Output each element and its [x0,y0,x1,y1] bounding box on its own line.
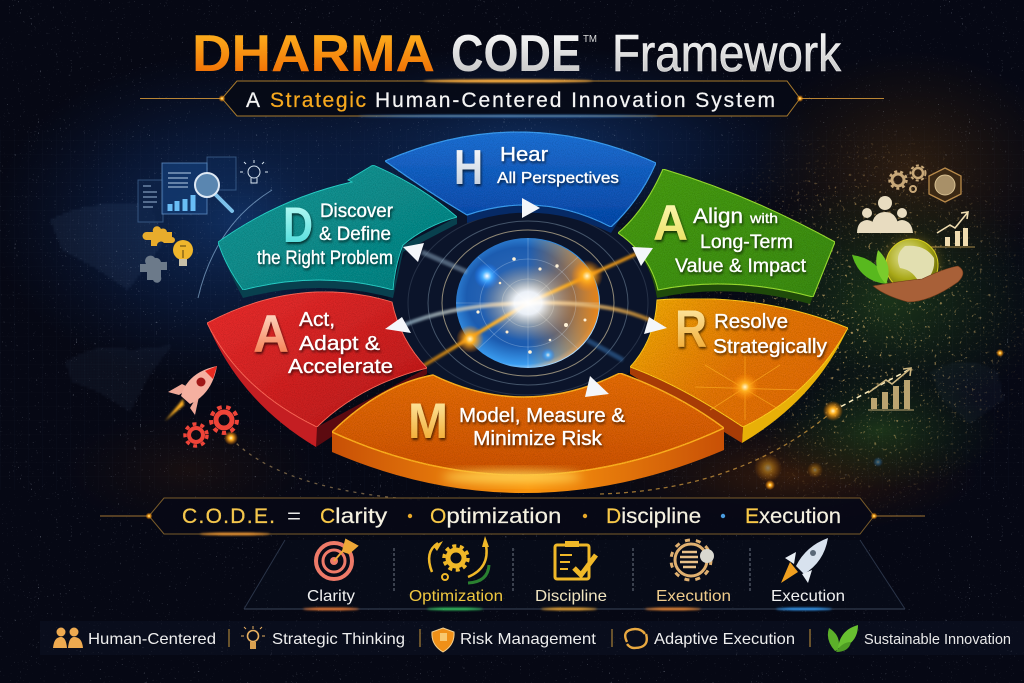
execution word: xecution [759,505,841,528]
world map left upper [50,203,165,290]
Act text: Act, [299,309,335,331]
central hub [388,203,668,403]
icon: clipboard [555,541,596,579]
H text: All Perspectives [497,170,619,187]
Act text: Accelerate [288,356,393,378]
letter A red: A [253,305,289,364]
letter H: H [454,141,483,195]
orange sparks [456,260,603,353]
Align text: Value & Impact [675,255,807,277]
globe [885,238,939,292]
bottom values band [40,621,1024,655]
subtitle banner [140,79,884,117]
dot [583,514,587,518]
icon: gear execution [671,540,714,580]
Align text [675,205,807,277]
star burst [695,350,800,420]
CODE banner [100,498,925,535]
label: Strategic Thinking: Strategic Thinking [272,631,405,648]
orb flare [482,265,574,341]
panel: H Hear [385,132,656,233]
icon: target [316,540,357,579]
bulb outline [240,160,268,183]
label: Adaptive Execution: Adaptive Execution [654,631,795,648]
icons cluster: align [852,166,975,302]
label: Risk Management: Risk Management [460,631,597,648]
optimization word: O [430,505,446,528]
icons cluster: rocket and gears [165,366,237,446]
Model text: Minimize Risk [473,428,603,450]
title: CODE: CODE [451,25,581,83]
subtitle text: Strategic [270,89,366,112]
diagonal orange beam [423,254,636,366]
dot [408,514,412,518]
Model text: Model, Measure & [459,405,626,427]
clarity word: C [320,505,335,528]
label: Clarity: Clarity [307,588,355,605]
Align text: Align [693,205,743,228]
label: Discipline: Discipline [535,588,607,605]
puzzle yellow [142,226,175,246]
icon: rocket white [781,538,828,583]
title: trademark: TM [583,34,597,45]
icons cluster: discover [138,157,268,283]
letter D: D [283,197,313,253]
Align text: with [749,210,778,226]
label: Human-Centered: Human-Centered [88,631,216,648]
arrow H [522,198,540,218]
title: DHARMA: DHARMA [192,25,435,83]
Model text [459,405,626,450]
CODE label: C.O.D.E. [182,505,275,528]
cycle arrows [385,198,667,397]
magnifier [195,173,232,211]
leaves [852,250,889,284]
glow at base [442,471,582,483]
arrow M [585,376,609,397]
discipline word: D [606,505,621,528]
world map right [930,362,1004,424]
chart document [162,163,207,214]
equals: = [287,505,301,528]
clarity word: larity [335,505,388,528]
icon: leaves [828,625,858,652]
panel: R Resolve [630,299,848,443]
Align text: Long-Term [700,231,793,253]
letter A green: A [653,195,688,251]
Act text [288,309,393,378]
subtitle text: Human-Centered Innovation System [375,89,775,112]
orb [456,238,600,368]
execution word: E [745,505,759,528]
icon: shield [432,628,454,652]
Act text: Adapt & [299,333,381,355]
dotted arc left [224,431,420,500]
puzzle gray [140,256,167,283]
D text [257,200,393,269]
title: Framework: Framework [612,25,842,83]
icon: bulb [241,626,265,649]
icon: right growth chart [868,368,914,410]
label: Optimization: Optimization [409,588,503,605]
dot [721,514,725,518]
bulb yellow [173,240,193,266]
beam blue lower right [587,340,623,360]
beam to discover [422,252,467,272]
dashed growth arc right [600,349,1004,494]
gear small [185,424,207,446]
hub dark disc [388,203,668,403]
rocket [165,366,217,421]
panel: D Discover [218,165,457,298]
title [192,25,842,83]
Resolve text: Resolve [714,311,788,333]
label: Sustainable Innovation: Sustainable Innovation [864,631,1011,648]
D text: & Define [319,223,391,245]
optimization word: ptimization [446,505,561,528]
Resolve text [713,311,827,358]
Resolve text: Strategically [713,336,827,358]
label: Execution: Execution [656,588,731,605]
subtitle text: A [246,89,260,112]
arrow D [403,243,424,262]
hub rings [408,211,648,395]
gear large [211,407,237,433]
horizontal arc beam [402,303,650,326]
label: Execution white: Execution [771,588,845,605]
panel: A Align [618,169,835,304]
world map left lower [65,345,172,412]
back panel [207,157,236,190]
panel: M Model [332,373,724,493]
letter R: R [675,300,707,359]
arrow R [644,317,667,334]
icon: sync [625,629,647,648]
H text: Hear [500,144,548,166]
icon: people [53,628,83,648]
gears [890,166,926,192]
pillars row [244,536,905,610]
discipline word: iscipline [621,505,701,528]
growth chart [925,212,975,247]
letter M: M [408,393,448,449]
decorative arc near discover panel [198,190,272,298]
H text [497,144,619,187]
panel: A Act [207,292,427,447]
D text: the Right Problem [257,247,393,269]
arrow A act [385,317,411,333]
icon: optimization [429,536,489,583]
hand [873,266,963,302]
people [857,196,913,233]
arrow A align [632,247,653,266]
hexagon emblem [929,168,961,202]
left document [138,180,163,222]
D text: Discover [320,200,393,222]
